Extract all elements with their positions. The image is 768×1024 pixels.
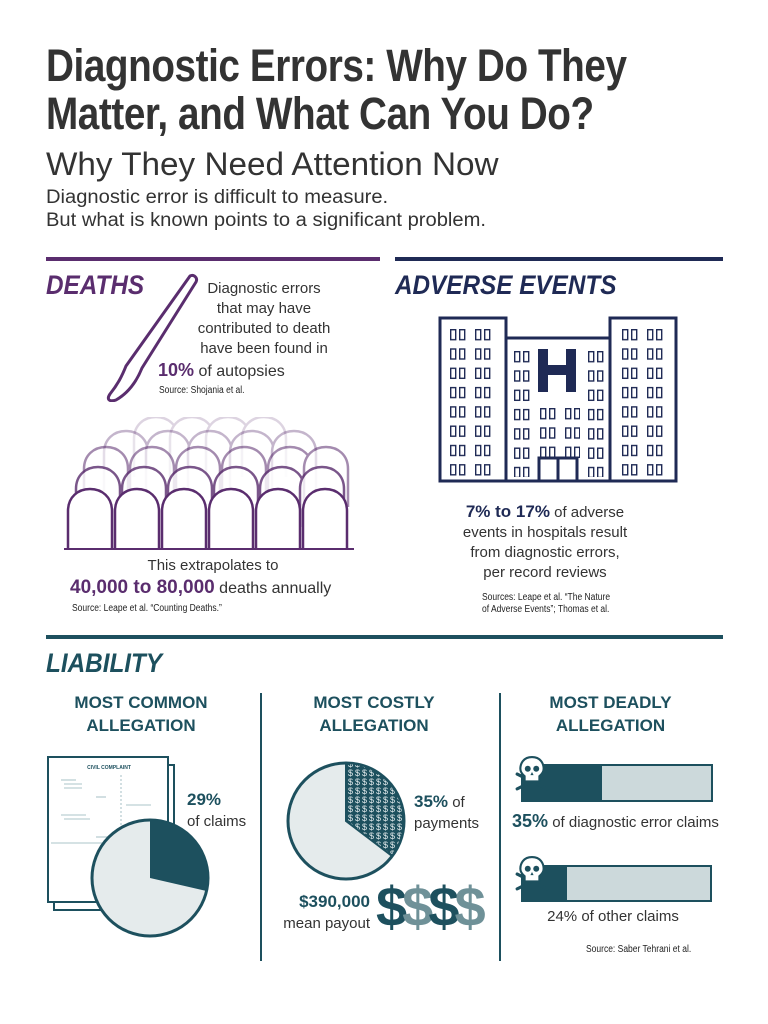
text: mean payout: mean payout — [283, 915, 370, 932]
bar: diagnostic error claims — [521, 764, 713, 802]
subtitle: Why They Need Attention Now — [46, 146, 499, 182]
intro text: But what is known points to a significant problem. — [46, 210, 486, 231]
panel: deaths: Source: Leape et al. “Counting Deaths.” — [72, 603, 222, 614]
text: autopsy stat: Diagnostic errors — [207, 280, 321, 297]
column: most common: MOST COMMON — [74, 693, 208, 712]
chart: payments pie — [286, 762, 406, 880]
icon: civil complaint with pie — [47, 756, 210, 938]
column: most costly: 35% of — [414, 792, 465, 811]
panel: adverse events: of Adverse Events”; Thomas et al. — [482, 604, 609, 615]
panel: deaths: 10% of autopsies — [158, 360, 285, 380]
column: most deadly: MOST DEADLY — [549, 693, 672, 712]
icon: tombstones — [64, 417, 354, 550]
heading: adverse events: ADVERSE EVENTS — [395, 270, 616, 300]
panel: adverse events: Sources: Leape et al. “The Nature — [482, 592, 610, 603]
panel: adverse events — [394, 257, 723, 615]
column: most costly — [283, 693, 485, 938]
intro text — [46, 187, 486, 231]
panel: deaths — [46, 257, 380, 614]
heading: deaths: DEATHS — [46, 270, 144, 300]
column: most deadly: 35% of diagnostic error claims — [512, 811, 719, 831]
column: most costly: ALLEGATION — [319, 716, 429, 735]
text: adverse stat — [463, 502, 628, 581]
icon: scalpel — [106, 274, 198, 402]
text: autopsy stat: contributed to death — [198, 320, 330, 337]
column: most common: 29% — [187, 790, 221, 809]
bar: other claims — [521, 865, 712, 902]
title — [46, 40, 627, 139]
text: mean payout: $390,000 — [299, 892, 370, 911]
text: adverse stat: per record reviews — [483, 564, 607, 581]
text: autopsy stat: that may have — [217, 300, 311, 317]
panel: deaths: 40,000 to 80,000 deaths annually — [70, 577, 331, 598]
column: most deadly: ALLEGATION — [556, 716, 665, 735]
column: most deadly: 24% of other claims — [547, 908, 679, 925]
panel: liability — [46, 635, 723, 961]
text: extrapolation: This extrapolates to — [148, 557, 278, 574]
text: adverse stat: events in hospitals result — [463, 524, 627, 541]
title: Matter, and What Can You Do? — [46, 88, 594, 139]
column: most deadly — [512, 693, 719, 955]
column: most costly: MOST COSTLY — [313, 693, 435, 712]
column: most common — [47, 693, 246, 938]
icon: dollar signs: $$$$ — [376, 875, 481, 938]
text: autopsy stat — [198, 280, 330, 357]
column: most common: ALLEGATION — [86, 716, 196, 735]
panel: deaths: Source: Shojania et al. — [159, 385, 245, 396]
intro text: Diagnostic error is difficult to measure. — [46, 187, 388, 208]
text: adverse stat: 7% to 17% of adverse — [466, 502, 624, 521]
text: adverse stat: from diagnostic errors, — [470, 544, 620, 561]
icon: hospital — [438, 316, 678, 482]
column: most costly: payments — [414, 815, 479, 832]
column: most common: of claims — [187, 813, 246, 830]
column: most deadly: Source: Saber Tehrani et al. — [586, 944, 691, 955]
icon: skull 2 — [516, 856, 544, 890]
icon: skull — [516, 756, 544, 790]
text: mean payout — [283, 892, 370, 932]
text: autopsy stat: have been found in — [200, 340, 328, 357]
heading: liability: LIABILITY — [46, 648, 162, 678]
icon: civil complaint with pie: CIVIL COMPLAINT — [87, 765, 131, 771]
title: Diagnostic Errors: Why Do They — [46, 40, 627, 91]
